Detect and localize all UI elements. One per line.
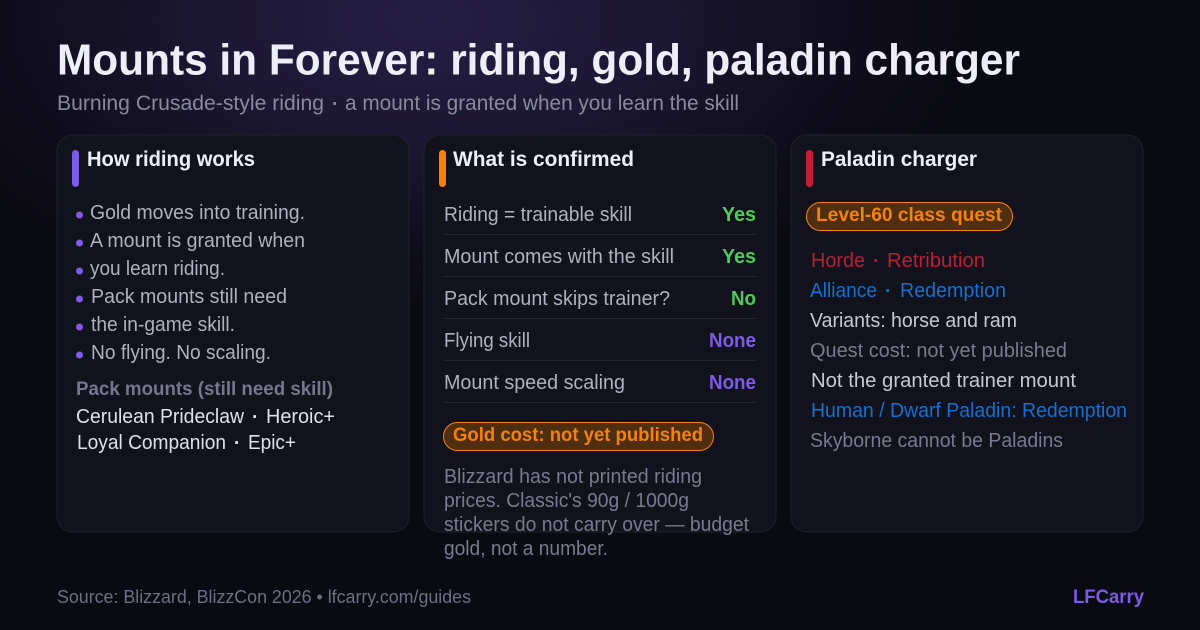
- heading: how riding works: How riding works: [87, 148, 255, 171]
- bullet list: you learn riding.: [90, 258, 225, 280]
- paladin facts: Skyborne cannot be Paladins: [810, 430, 1063, 452]
- bullet list: the in-game skill.: [91, 314, 235, 336]
- status table: Flying skill: [444, 330, 530, 352]
- paladin facts: ·: [885, 281, 891, 302]
- paladin facts: Alliance: [810, 280, 877, 302]
- status table: No: [731, 288, 756, 310]
- status table: Yes: [722, 246, 756, 268]
- title: Mounts in Forever: riding, gold, paladin charger: [57, 36, 1020, 84]
- panel: what is confirmed: [424, 135, 776, 560]
- pack mount list: Loyal Companion: [77, 432, 226, 454]
- footer source: Source: Blizzard, BlizzCon 2026 • lfcarry.com/guides: [57, 587, 471, 607]
- gold cost note: Blizzard has not printed riding: [444, 466, 702, 488]
- pack mount list: Cerulean Prideclaw: [76, 406, 245, 428]
- status table: Mount comes with the skill: [444, 246, 674, 268]
- pack mount list: ·: [252, 407, 258, 428]
- paladin facts: Not the granted trainer mount: [811, 370, 1076, 392]
- paladin facts: [810, 250, 1127, 452]
- paladin facts: Redemption: [900, 280, 1006, 302]
- accent bar: purple: [72, 150, 79, 187]
- status table: None: [709, 372, 756, 394]
- gold cost note: gold, not a number.: [444, 538, 608, 560]
- heading: paladin charger: Paladin charger: [821, 148, 977, 171]
- gold cost note: stickers do not carry over — budget: [444, 514, 749, 536]
- bullet list: Gold moves into training.: [90, 202, 305, 224]
- pack mounts subheading: Pack mounts (still need skill): [76, 379, 333, 400]
- subtitle: [57, 92, 739, 115]
- subtitle: ·: [332, 94, 338, 115]
- status table: Yes: [722, 204, 756, 226]
- panel: how riding works: [57, 135, 409, 532]
- pack mount list: Heroic+: [266, 406, 335, 428]
- bullet list: Pack mounts still need: [91, 286, 287, 308]
- badge: level-60 class quest: [806, 202, 1012, 230]
- gold cost note: [444, 466, 749, 560]
- accent bar: orange: [439, 150, 446, 187]
- bullet list: A mount is granted when: [90, 230, 305, 252]
- heading: what is confirmed: What is confirmed: [453, 148, 634, 171]
- bullet list: No flying. No scaling.: [91, 342, 271, 364]
- status table: [443, 204, 757, 402]
- bullet list: [76, 202, 305, 364]
- subtitle: Burning Crusade-style riding: [57, 92, 324, 115]
- status table: None: [709, 330, 756, 352]
- paladin facts: Retribution: [887, 250, 985, 272]
- paladin facts: ·: [873, 251, 879, 272]
- footer brand: LFCarry: [1073, 587, 1144, 608]
- gold cost note: prices. Classic's 90g / 1000g: [444, 490, 689, 512]
- panel: paladin charger: [791, 135, 1143, 532]
- accent bar: red: [806, 150, 813, 187]
- badge: level-60 class quest: Level-60 class quest: [816, 205, 1003, 226]
- badge: gold cost: Gold cost: not yet published: [453, 425, 703, 446]
- subtitle: a mount is granted when you learn the skill: [345, 92, 739, 115]
- paladin facts: Quest cost: not yet published: [810, 340, 1067, 362]
- status table: Riding = trainable skill: [444, 204, 632, 226]
- paladin facts: Horde: [811, 250, 865, 272]
- status table: Mount speed scaling: [444, 372, 625, 394]
- paladin facts: Variants: horse and ram: [810, 310, 1017, 332]
- status table: Pack mount skips trainer?: [444, 288, 670, 310]
- paladin facts: Human / Dwarf Paladin: Redemption: [811, 400, 1127, 422]
- pack mount list: [76, 406, 335, 454]
- pack mount list: Epic+: [248, 432, 296, 454]
- pack mount list: ·: [234, 433, 240, 454]
